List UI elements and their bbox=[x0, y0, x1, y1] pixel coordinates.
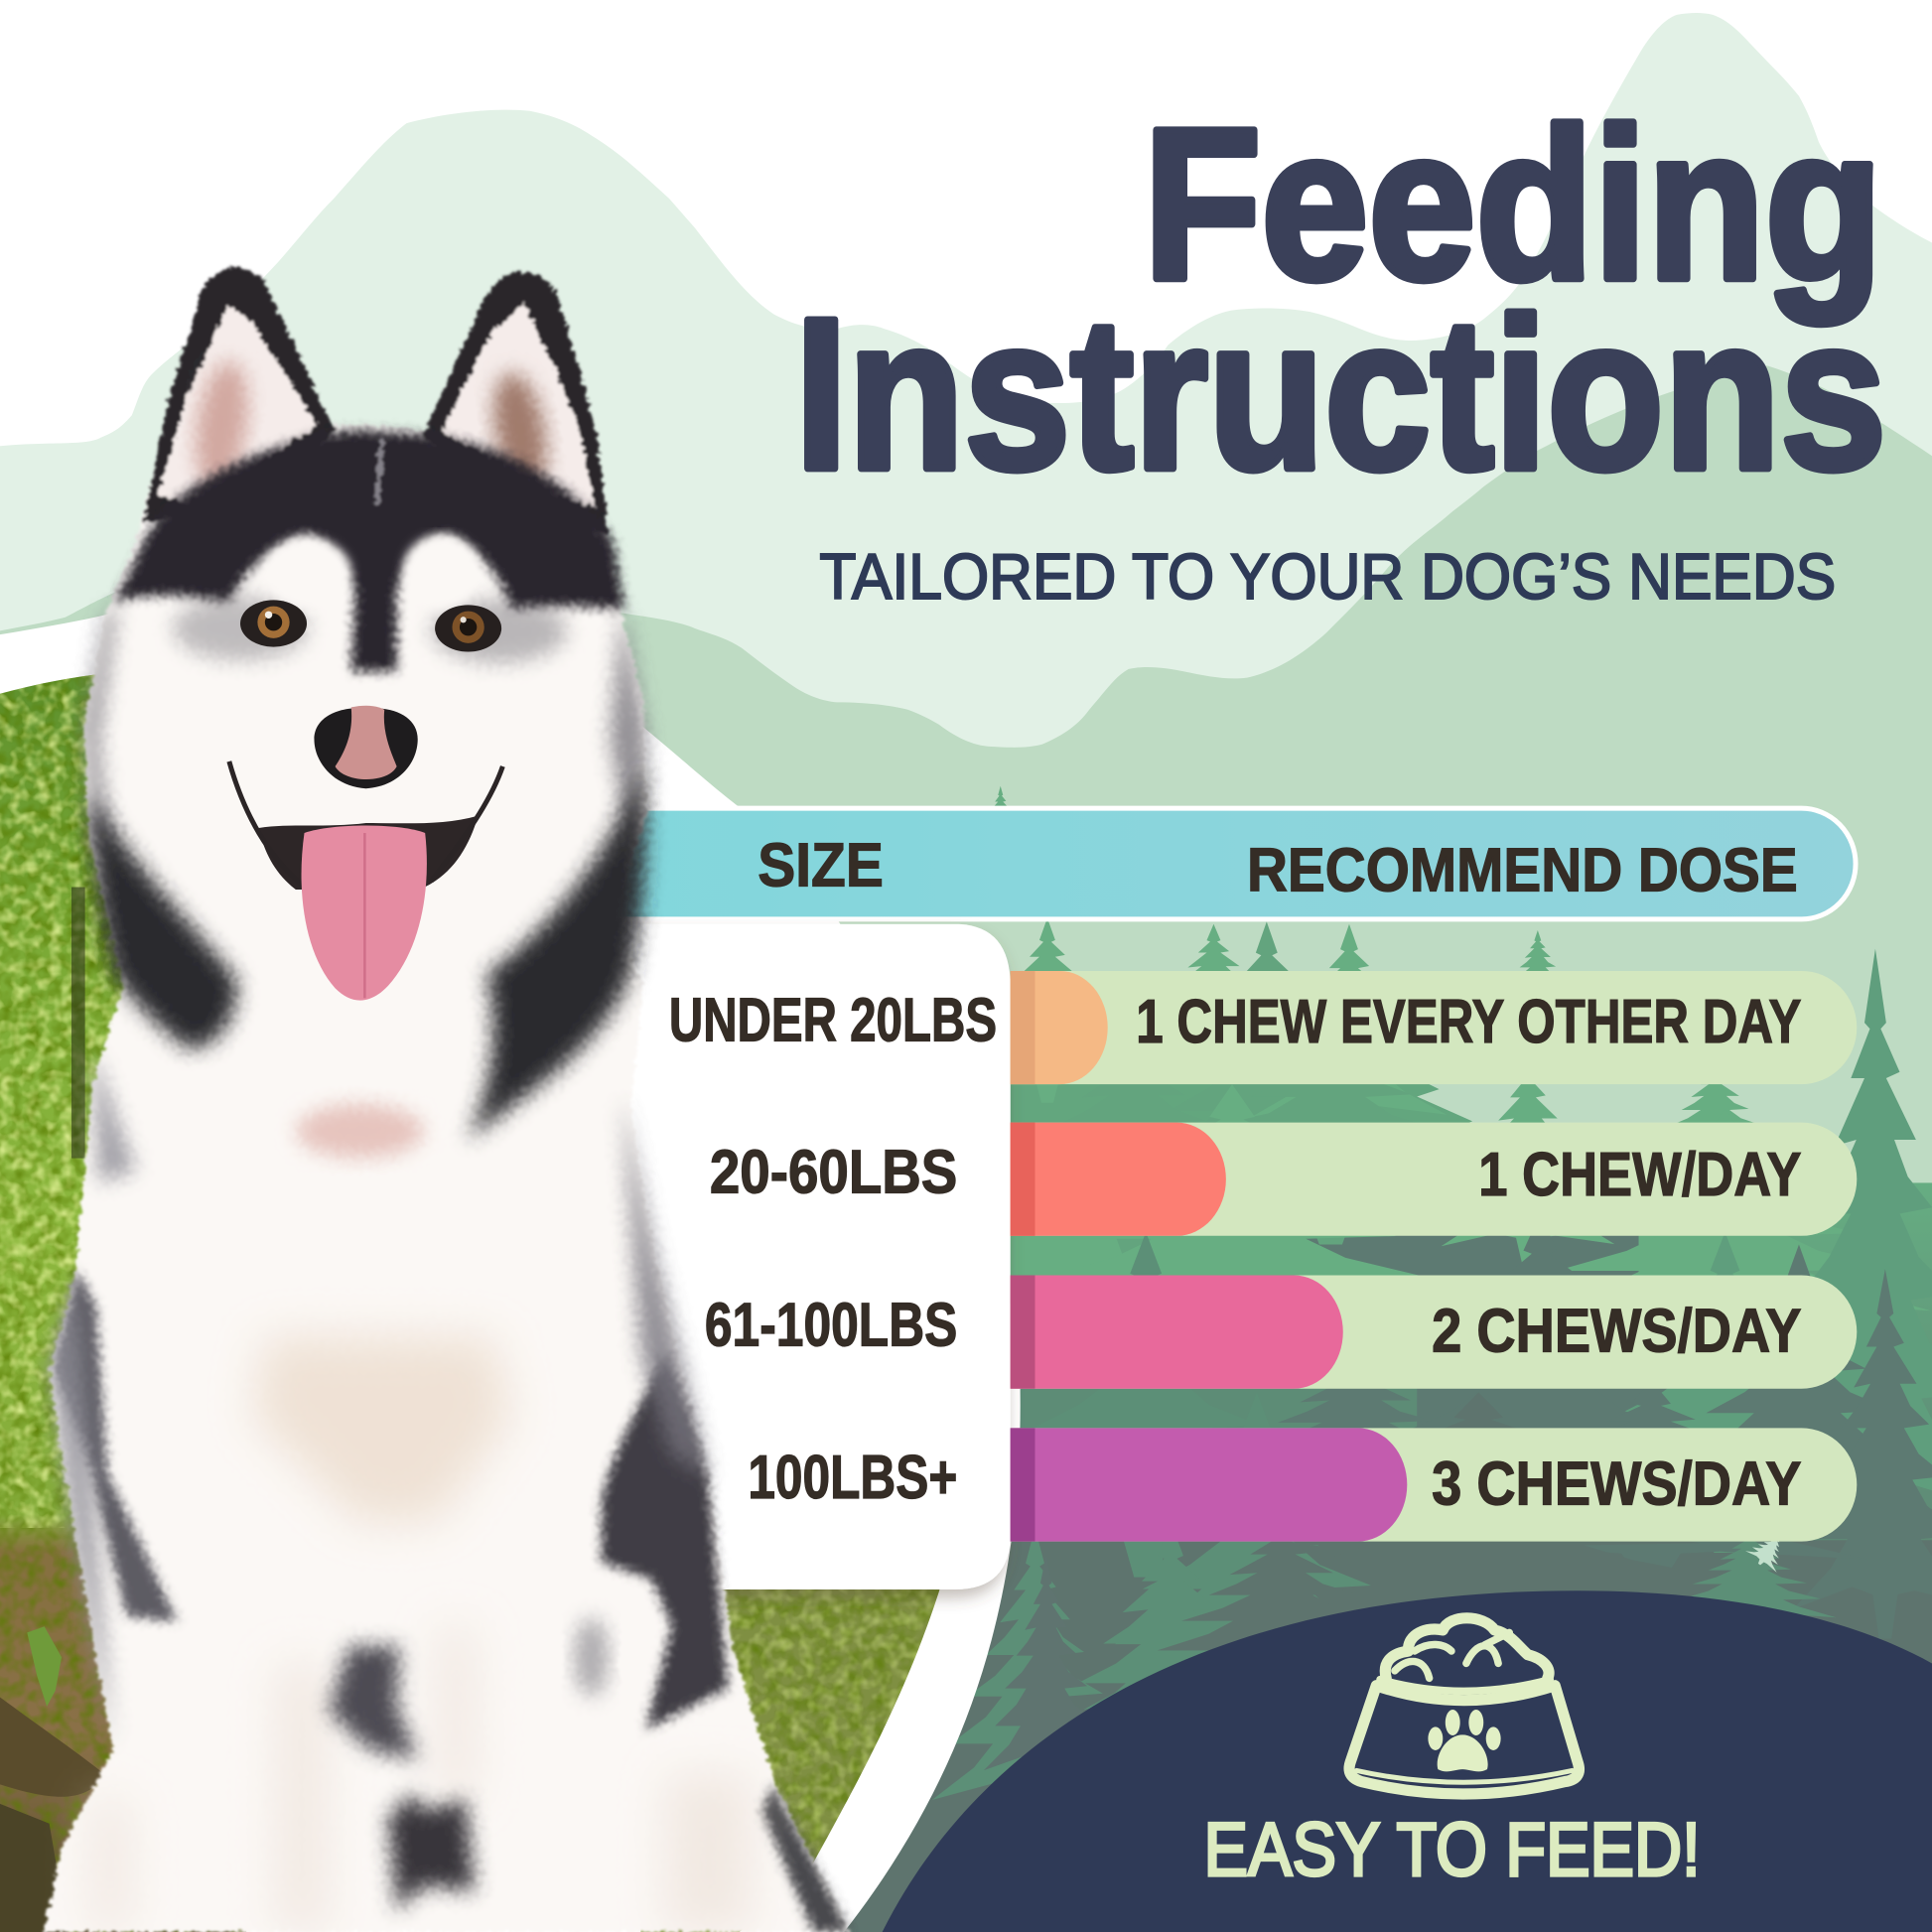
left eye bbox=[240, 600, 307, 647]
head side shading bbox=[83, 604, 647, 863]
dose row 2 bbox=[1011, 1123, 1857, 1236]
size label: 100lbs+: 100LBS+ bbox=[748, 1444, 957, 1512]
icon: food bowl bbox=[1349, 1618, 1579, 1794]
forest photo in the arch bbox=[0, 665, 973, 1932]
tongue bbox=[302, 826, 427, 1001]
nose bbox=[314, 706, 418, 788]
ear insides bbox=[158, 303, 595, 507]
neck ruff right bbox=[469, 758, 645, 1140]
right eye bbox=[435, 605, 501, 652]
subtitle: TAILORED TO YOUR DOG’S NEEDS bbox=[819, 541, 1836, 613]
throat pink bbox=[296, 1104, 424, 1159]
eyebrows bbox=[265, 535, 480, 609]
size label: 61-100lbs: 61-100LBS bbox=[705, 1291, 957, 1359]
dose row 1 bbox=[1011, 971, 1857, 1084]
left side band bbox=[56, 1269, 178, 1621]
easy to feed caption: EASY TO FEED! bbox=[1204, 1808, 1701, 1892]
size label: under 20lbs: UNDER 20LBS bbox=[669, 987, 997, 1055]
bowl body bbox=[1349, 1686, 1579, 1794]
forehead mask bbox=[113, 430, 624, 671]
ear shading bbox=[189, 358, 255, 492]
bowl rim bbox=[1380, 1680, 1550, 1691]
dose row 4: 3 CHEWS/DAY bbox=[1432, 1449, 1801, 1518]
husky dog bbox=[43, 267, 850, 1932]
header: recommend dose: RECOMMEND DOSE bbox=[1247, 836, 1798, 904]
white size panel bbox=[579, 924, 1011, 1589]
chest dark patch lower bbox=[388, 1793, 475, 1910]
navy hill bbox=[883, 1590, 1932, 1932]
background: light mountains bbox=[0, 13, 1932, 863]
kibble bbox=[1385, 1618, 1549, 1678]
chest dark patch upper bbox=[329, 1646, 418, 1759]
dose row 3 bbox=[1011, 1276, 1857, 1389]
paw print bbox=[1428, 1710, 1501, 1771]
chest tan patch bbox=[252, 1337, 511, 1522]
forehead stripe bbox=[374, 439, 384, 505]
dose row 4 bbox=[1011, 1428, 1857, 1542]
right leg fleck bbox=[574, 1618, 609, 1697]
dose row 2: 1 CHEW/DAY bbox=[1478, 1141, 1801, 1209]
white hill bbox=[0, 600, 1021, 1932]
size label: 20-60lbs: 20-60LBS bbox=[710, 1138, 957, 1206]
dose row 3: 2 CHEWS/DAY bbox=[1432, 1297, 1801, 1365]
mouth bbox=[229, 761, 502, 890]
ear outlines bbox=[143, 267, 609, 536]
far right edge strip bbox=[761, 1784, 850, 1932]
table header bar bbox=[579, 808, 1856, 919]
neck ruff left bbox=[91, 794, 237, 1048]
forest tree silhouettes bbox=[788, 786, 1932, 1932]
dog silhouette bbox=[43, 269, 850, 1932]
title: feeding instructions bbox=[794, 83, 1886, 515]
right side band bbox=[602, 1353, 728, 1729]
header: size: SIZE bbox=[758, 831, 884, 899]
grey shading around eyes bbox=[173, 597, 308, 660]
dog body and markings bbox=[43, 267, 850, 1932]
leg shading bbox=[92, 1626, 752, 1932]
